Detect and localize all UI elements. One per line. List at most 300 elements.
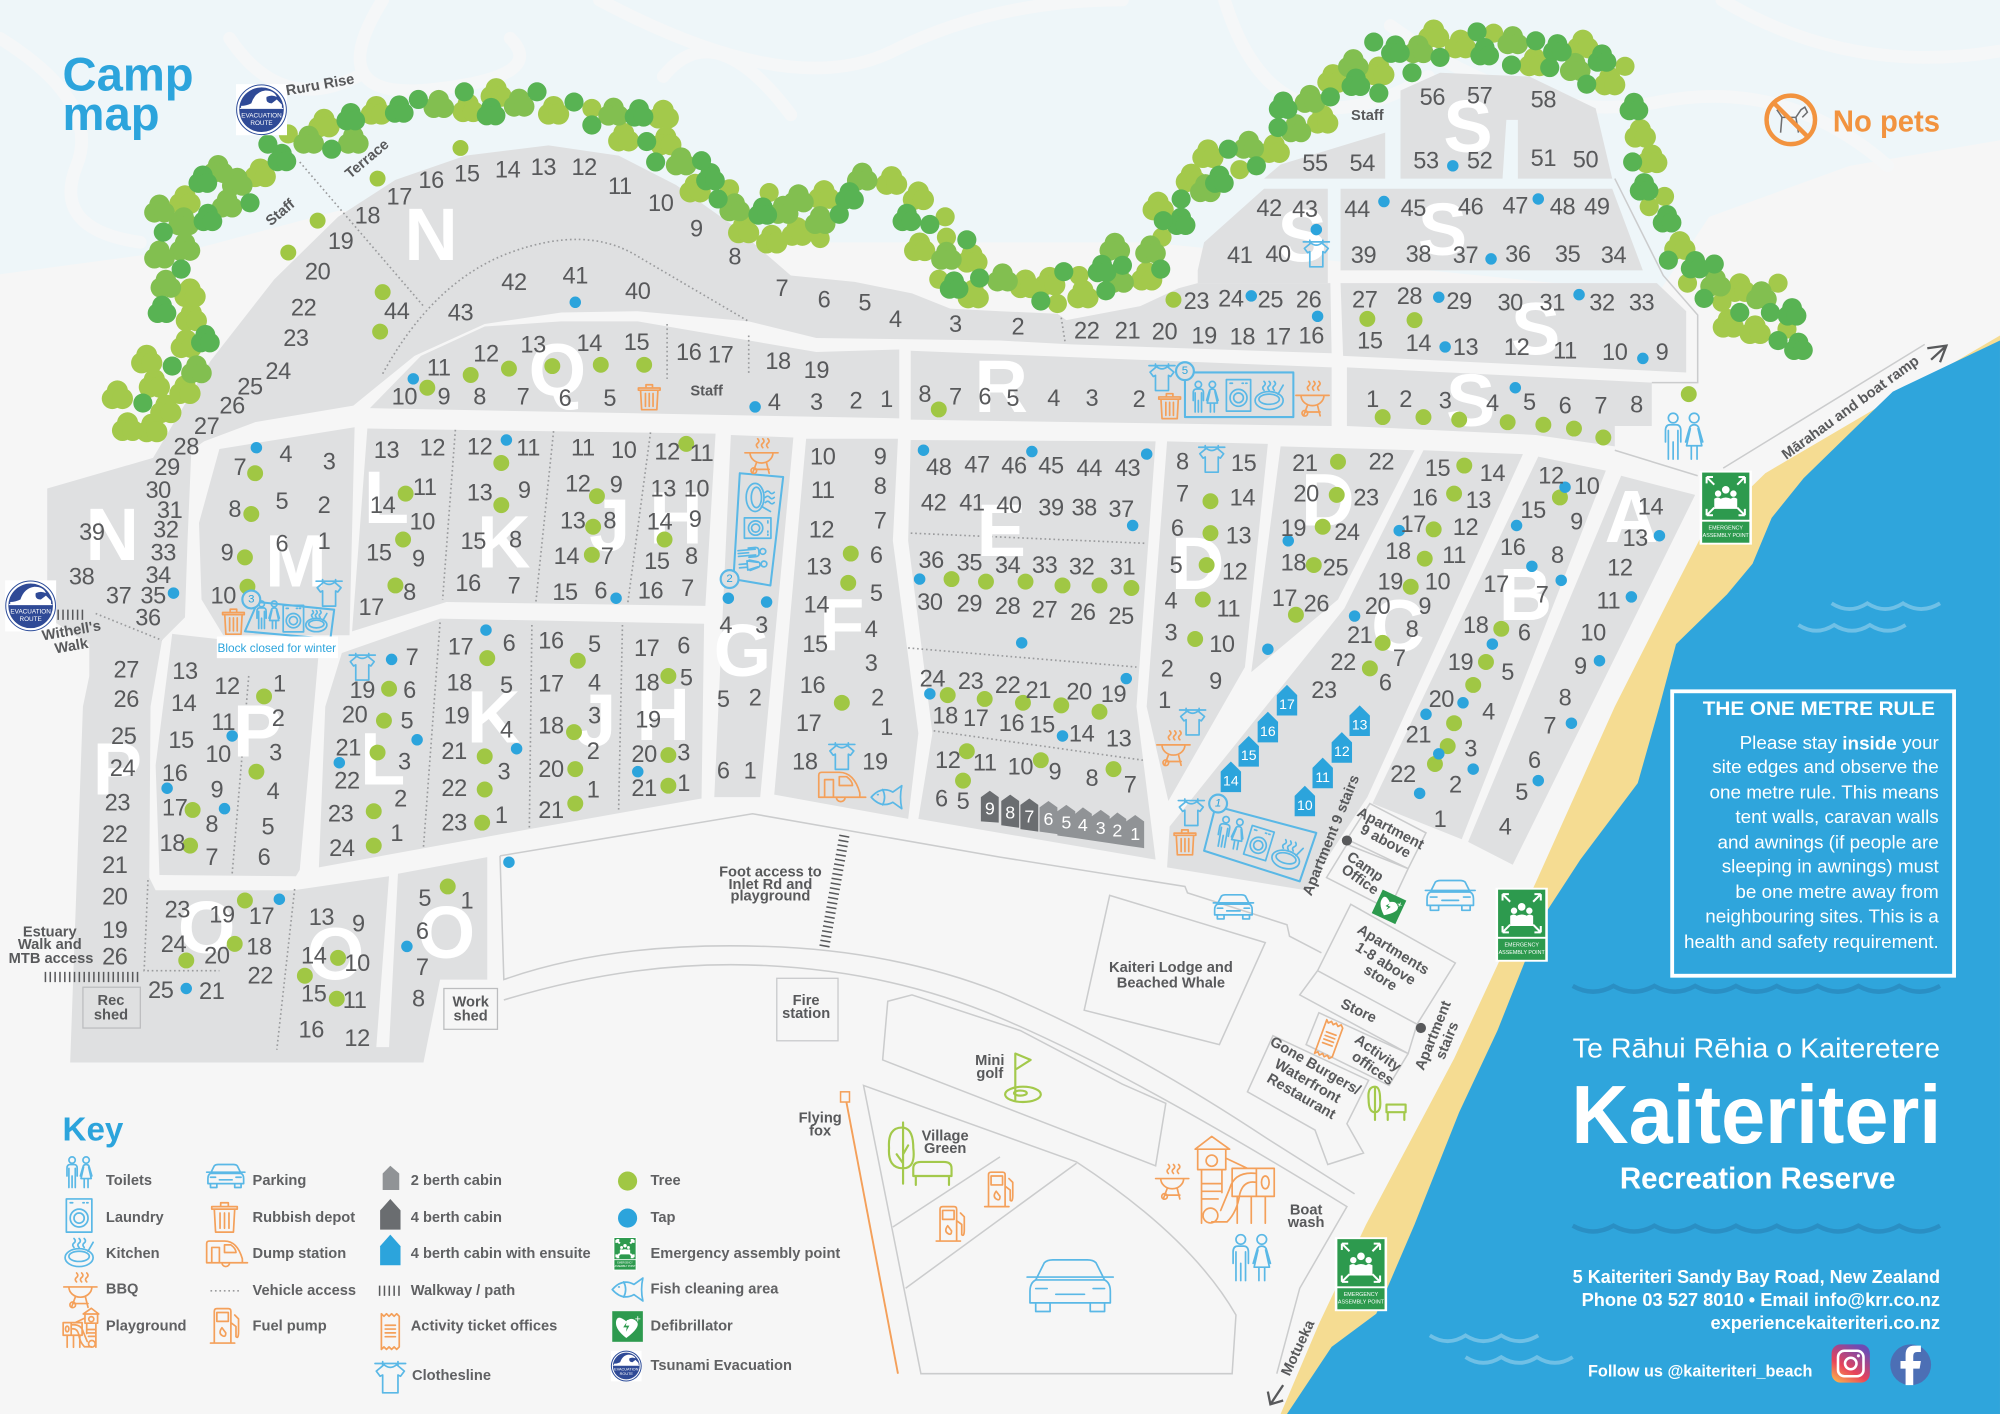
site numbers: N upper: 8: [728, 243, 741, 269]
site numbers: N upper: 42: [501, 269, 527, 295]
site numbers: L K J H lower: 18: [634, 669, 660, 695]
4 berth and 2 berth cabins: 3: [1096, 818, 1106, 838]
4 berth and 2 berth cabins: 7: [1024, 806, 1034, 826]
site numbers: E: 17: [963, 705, 989, 731]
site numbers: E: 23: [958, 668, 984, 694]
site numbers: E: 34: [995, 552, 1021, 578]
site numbers: N upper: 12: [571, 154, 597, 180]
map labels: Flying: [799, 1111, 842, 1127]
site numbers: L K J H lower: 19: [444, 703, 469, 729]
site numbers: E: 44: [1077, 455, 1102, 481]
site numbers: N upper: 7: [776, 275, 788, 301]
icon: mini golf: [1005, 1054, 1041, 1102]
site numbers: L K J H upper: 10: [684, 476, 709, 502]
site numbers: D: 21: [1292, 450, 1318, 476]
site numbers: A: 13: [1622, 525, 1648, 551]
icon: fish cleaning: [871, 786, 902, 809]
block closed for winter label: Block closed for winter: [217, 641, 336, 655]
site numbers: M: 9: [221, 539, 233, 565]
big block letters: G: [714, 609, 771, 692]
site numbers: L K J H lower: 22: [441, 775, 467, 801]
big block letters: K: [477, 501, 531, 584]
map labels: Apartments: [1354, 922, 1432, 979]
facilities box 2: 2: [726, 573, 733, 585]
block: Q: [370, 321, 899, 418]
site numbers: N upper: 9: [690, 215, 703, 241]
map labels: Foot access to: [719, 864, 822, 880]
shed boxes: Work: [452, 995, 490, 1011]
site numbers: N upper: 37: [106, 583, 131, 609]
site numbers: F and G: 10: [810, 444, 836, 470]
site numbers: Q: 12: [473, 340, 499, 366]
site numbers: B: 22: [1390, 761, 1416, 787]
site numbers: L K J H lower: 21: [538, 797, 564, 823]
site numbers: S: 44: [1344, 196, 1370, 222]
block: G: [714, 435, 793, 797]
site numbers: L K J H lower: 1: [587, 777, 599, 803]
key labels: [106, 1173, 840, 1384]
site numbers: L K J H lower: 17: [634, 635, 659, 661]
big block letters: [86, 85, 1658, 996]
site numbers: D: 14: [1230, 484, 1255, 510]
map labels: Apartment: [1354, 805, 1427, 853]
site numbers: S: 6: [1559, 393, 1572, 419]
site numbers: L K J H lower: 23: [441, 810, 467, 836]
site numbers: L K J H upper: 8: [685, 543, 698, 569]
site numbers: C: 21: [1347, 622, 1372, 648]
site numbers: D: 10: [1209, 631, 1235, 657]
site numbers: S: 13: [1453, 334, 1479, 360]
site numbers: L K J H lower: 5: [588, 631, 601, 657]
site numbers: D: 2: [1161, 655, 1173, 681]
site numbers: N upper: 18: [355, 203, 380, 229]
map labels: Waterfront: [1272, 1056, 1343, 1107]
site numbers: Q: 17: [708, 342, 733, 368]
site numbers: O: 20: [204, 942, 230, 968]
4 berth and 2 berth cabins: 8: [1005, 802, 1015, 822]
site numbers: Q: 10: [392, 384, 417, 410]
site numbers: D: 23: [1353, 484, 1379, 510]
site numbers: E: 19: [1101, 681, 1126, 707]
site numbers: N upper: 22: [291, 294, 316, 320]
site numbers: E: 33: [1032, 552, 1058, 578]
site numbers: S: 23: [1184, 288, 1209, 314]
site numbers: B: 1: [1434, 806, 1446, 832]
site numbers: R: 3: [1085, 385, 1098, 411]
site numbers: C: 17: [1401, 511, 1426, 537]
key labels: Tree: [651, 1173, 681, 1189]
site numbers: A: 7: [1543, 713, 1556, 739]
walkways: [45, 615, 844, 977]
site numbers: C: 22: [1330, 649, 1356, 675]
light waves in the sea: [1430, 603, 1940, 1363]
map labels: Withell's: [41, 618, 102, 644]
site numbers: D: 13: [1226, 523, 1252, 549]
site numbers: left column and P: 24: [110, 755, 135, 781]
site numbers: D: 25: [1323, 555, 1348, 581]
site numbers: L K J H upper: 16: [638, 578, 664, 604]
site numbers: R: 5: [1006, 385, 1019, 411]
site numbers: D: 5: [1170, 552, 1183, 578]
site numbers: M: 5: [276, 488, 289, 514]
site numbers: L K J H upper: 14: [370, 492, 396, 518]
site numbers: L K J H lower: 20: [631, 741, 657, 767]
map labels: Apartment 9 stairs: [1300, 773, 1363, 898]
site numbers: B: 19: [1448, 649, 1473, 675]
site numbers: F and G: 4: [865, 616, 878, 642]
site numbers: O: 1: [460, 887, 473, 913]
map labels: offices: [1348, 1049, 1396, 1089]
site numbers: N upper: 16: [418, 167, 444, 193]
site numbers: S: 48: [1550, 194, 1575, 220]
site numbers: Q: 7: [517, 384, 529, 410]
site numbers: left column and P: 14: [171, 690, 197, 716]
big block letters: M: [265, 520, 327, 603]
site numbers: B: 9: [1570, 509, 1583, 535]
big block letters: Q: [529, 328, 586, 411]
site numbers: S: 57: [1467, 83, 1492, 109]
site numbers: N upper: 29: [154, 454, 180, 480]
site numbers: L K J H lower: 5: [401, 708, 414, 734]
site numbers: S: 16: [1298, 322, 1324, 348]
key labels: Rubbish depot: [253, 1210, 355, 1226]
map labels: Village: [922, 1128, 969, 1144]
key labels: 4 berth cabin with ensuite: [411, 1246, 591, 1262]
map labels: Motueka: [1279, 1317, 1319, 1379]
site numbers: F and G: 11: [811, 477, 835, 503]
site numbers: S: 32: [1589, 289, 1615, 315]
site numbers: B: 7: [1536, 581, 1548, 607]
icon: small tree and bench: [1368, 1087, 1406, 1120]
icon: dump station: [819, 772, 866, 802]
block: D second: [1251, 446, 1415, 672]
big block letters: N: [86, 493, 139, 576]
site numbers: M: 6: [276, 530, 289, 556]
site numbers: S: 52: [1467, 148, 1492, 174]
site numbers: C: 15: [1425, 455, 1450, 481]
site numbers: L K J H lower: 6: [677, 632, 690, 658]
key labels: BBQ: [106, 1282, 138, 1298]
site numbers: Q: 8: [473, 384, 486, 410]
site numbers: L K J H upper: 11: [571, 435, 595, 461]
site numbers: S: 42: [1256, 195, 1282, 221]
site numbers: L K J H lower: 6: [503, 630, 516, 656]
map labels: playground: [731, 889, 810, 905]
site numbers: O: 9: [352, 910, 365, 936]
site numbers: L K J H lower: 3: [677, 740, 690, 766]
site numbers: L K J H upper: [358, 433, 713, 620]
site numbers: F and G: 2: [871, 685, 884, 711]
site numbers: D: 11: [1216, 595, 1240, 621]
site numbers: left column and P: 6: [258, 844, 271, 870]
site numbers: D: 3: [1165, 620, 1178, 646]
site numbers: L K J H lower: 1: [677, 770, 690, 796]
site numbers: E: 27: [1032, 597, 1057, 623]
key icons: [65, 1157, 643, 1393]
site numbers: S: 56: [1420, 84, 1445, 110]
site numbers: C: 16: [1412, 484, 1438, 510]
site numbers: E: 20: [1066, 678, 1092, 704]
site numbers: A: 5: [1515, 779, 1528, 805]
site numbers: left column and P: [102, 657, 286, 970]
site numbers: A: 9: [1574, 653, 1587, 679]
site numbers: E: 6: [935, 785, 948, 811]
site numbers: L K J H lower: 3: [497, 759, 510, 785]
4 berth cabins with ensuite: 16: [1260, 723, 1276, 739]
block: E: [908, 440, 1156, 860]
big block letters: J: [575, 679, 616, 762]
shed boxes: shed: [454, 1009, 488, 1025]
site numbers: S: 15: [1357, 328, 1383, 354]
site numbers: O: 13: [309, 904, 334, 930]
site numbers: L K J H upper: 14: [647, 509, 672, 535]
map labels: Staff: [263, 196, 298, 230]
map labels: wash: [1287, 1215, 1324, 1231]
key labels: Playground: [106, 1319, 187, 1335]
site numbers: O: 19: [209, 902, 235, 928]
panel: the one metre rule: site edges and observe the: [1712, 756, 1939, 777]
site numbers: C: 8: [1406, 616, 1419, 642]
social line: [1588, 1344, 1931, 1385]
4 berth and 2 berth cabins: [981, 791, 1144, 848]
site numbers: L K J H lower: 19: [635, 706, 661, 732]
site numbers: Q: 14: [577, 330, 602, 356]
site numbers: E: 25: [1108, 603, 1134, 629]
site numbers: L K J H upper: 7: [681, 575, 694, 601]
site numbers: S: 54: [1350, 150, 1375, 176]
site numbers: N upper: 34: [145, 562, 171, 588]
site numbers: L K J H lower: 17: [538, 671, 564, 697]
site numbers: O: 12: [344, 1025, 370, 1051]
site numbers: F and G: 9: [874, 444, 886, 470]
key labels: Parking: [253, 1173, 306, 1189]
site numbers: C: 23: [1311, 677, 1337, 703]
block: A: [1468, 476, 1695, 865]
site numbers: E: 36: [918, 547, 944, 573]
panel: key: [63, 1111, 840, 1393]
branding: Recreation Reserve: [1620, 1162, 1895, 1196]
panel: the one metre rule: one metre rule. This means: [1710, 782, 1939, 803]
site numbers: L K J H lower: 5: [500, 672, 513, 698]
site numbers: B: 16: [1500, 534, 1526, 560]
site numbers: F and G: 12: [809, 516, 834, 542]
tsunami evacuation signs: [5, 84, 287, 631]
site numbers: left column and P: 3: [269, 740, 282, 766]
site numbers: N upper: 20: [305, 259, 331, 285]
site numbers: B: 15: [1520, 497, 1546, 523]
big block letters: S: [1511, 288, 1560, 371]
site numbers: E: 48: [926, 454, 952, 480]
site numbers: E: 43: [1115, 455, 1141, 481]
map labels: Kaiteri Lodge and: [1109, 960, 1233, 976]
site numbers: N upper: [69, 154, 1024, 630]
site numbers: Q: 11: [427, 354, 451, 380]
site numbers: L K J H lower: 7: [406, 644, 418, 670]
site numbers: A: 14: [1638, 493, 1663, 519]
map labels: Apartment: [1413, 999, 1455, 1073]
site numbers: S: 11: [1553, 338, 1577, 364]
map labels: fox: [809, 1123, 832, 1139]
map labels: Gone Burgers/: [1267, 1034, 1363, 1099]
site numbers: N upper: 30: [145, 477, 171, 503]
site numbers: O: 21: [199, 978, 224, 1004]
site numbers: S: 31: [1540, 289, 1565, 315]
background koru pattern: [0, 0, 2000, 293]
site numbers: L K J H upper: 6: [594, 578, 607, 604]
site numbers: N upper: 36: [135, 604, 161, 630]
site numbers: E: 41: [959, 490, 985, 516]
map labels: stairs: [1433, 1020, 1462, 1062]
icon: ticket office: [1315, 1020, 1344, 1059]
vehicle access dotted lines: [96, 162, 1147, 1050]
site numbers: N upper: 17: [387, 183, 412, 209]
site numbers: L K J H lower: 2: [394, 785, 407, 811]
site numbers: B: 21: [1406, 722, 1431, 748]
site numbers: N upper: 24: [265, 358, 291, 384]
site numbers: O: 6: [416, 918, 429, 944]
site numbers: N upper: 15: [454, 160, 480, 186]
site numbers: M: 10: [210, 583, 236, 609]
contact details: experiencekaiteriteri.co.nz: [1710, 1312, 1940, 1333]
site numbers: D: 26: [1304, 590, 1329, 616]
map labels: Inlet Rd and: [728, 877, 812, 893]
4 berth cabins with ensuite: 14: [1223, 773, 1239, 789]
site numbers: L K J H upper: 9: [518, 477, 531, 503]
defibrillator: [1372, 890, 1406, 924]
site numbers: left column and P: 20: [102, 884, 128, 910]
site numbers: F and G: 2: [749, 685, 761, 711]
site numbers: A: 11: [1597, 588, 1620, 614]
icon: facebook: [1890, 1344, 1931, 1385]
site numbers: Q: 19: [804, 357, 829, 383]
site numbers: N upper: 10: [648, 190, 674, 216]
site numbers: F and G: 15: [802, 631, 828, 657]
site numbers: A: 6: [1528, 747, 1541, 773]
site numbers: left column and P: 26: [114, 686, 139, 712]
map labels: 9 above: [1357, 822, 1413, 862]
site numbers: E: 38: [1071, 495, 1097, 521]
direction arrows: [1268, 346, 1946, 1404]
site numbers: E: 26: [1070, 599, 1096, 625]
icon: fuel pumps: [936, 1172, 1013, 1241]
map labels: MTB access: [9, 951, 93, 967]
site numbers: S: 14: [1406, 330, 1431, 356]
panel: the one metre rule: Please stay inside your: [1740, 732, 1939, 753]
4 berth and 2 berth cabins: 2: [1112, 820, 1122, 840]
site numbers: S: 25: [1258, 287, 1283, 313]
block: F: [774, 439, 918, 819]
key labels: Fish cleaning area: [651, 1282, 779, 1298]
site numbers: B: 6: [1518, 620, 1531, 646]
site numbers: left column and P: 11: [211, 709, 235, 735]
site numbers: E: 10: [1008, 754, 1033, 780]
site numbers: E: 40: [996, 492, 1022, 518]
site numbers: S: 28: [1397, 283, 1422, 309]
site numbers: F and G: 19: [862, 748, 888, 774]
site numbers: D: [1158, 449, 1394, 713]
site numbers: C: 13: [1466, 487, 1491, 513]
site numbers: left column and P: 12: [214, 673, 240, 699]
site numbers: L K J H upper: 12: [654, 439, 680, 465]
site numbers: S: 3: [1439, 388, 1452, 414]
4 berth cabins with ensuite: 11: [1315, 769, 1330, 785]
site numbers: L K J H upper: 7: [508, 572, 520, 598]
site numbers: B: 17: [1483, 571, 1509, 597]
site numbers: D: 20: [1293, 481, 1319, 507]
site numbers: Q: 16: [676, 339, 702, 365]
branding: [1571, 1032, 1941, 1196]
site numbers: O: 23: [165, 896, 190, 922]
site numbers: E: 13: [1106, 726, 1132, 752]
block closed for winter label: [217, 636, 338, 658]
site numbers: C: 18: [1385, 538, 1411, 564]
4 berth cabins with ensuite: 10: [1297, 797, 1313, 813]
site numbers: Q: 13: [520, 331, 546, 357]
site numbers: L K J H upper: 15: [552, 579, 578, 605]
site numbers: S: 53: [1413, 148, 1439, 174]
big block letters: P: [233, 689, 282, 772]
site numbers: B: 4: [1482, 699, 1495, 725]
site numbers: S: 12: [1504, 334, 1529, 360]
site numbers: Q: 6: [559, 385, 572, 411]
site numbers: L K J H lower: 19: [350, 677, 375, 703]
panel: the one metre rule: and awnings (if people are: [1718, 831, 1939, 852]
site numbers: L K J H upper: 13: [374, 437, 399, 463]
site numbers: S: 37: [1453, 242, 1478, 268]
site numbers: L K J H upper: 12: [420, 435, 445, 461]
key labels: Defibrillator: [651, 1319, 733, 1335]
road and building outlines: [500, 179, 1925, 1374]
block: D first: [1147, 441, 1268, 801]
site numbers: S: 8: [1630, 391, 1643, 417]
title: [63, 49, 194, 141]
site numbers: O: 11: [343, 987, 366, 1013]
site numbers: S: 1: [1366, 386, 1379, 412]
site numbers: E: 5: [957, 788, 970, 814]
site numbers: D: 15: [1231, 450, 1257, 476]
title: map: [63, 88, 160, 141]
block: C and cabins: [1167, 450, 1523, 890]
site numbers: F and G: 3: [865, 650, 878, 676]
key labels: Toilets: [106, 1173, 152, 1189]
site numbers: B: 2: [1449, 771, 1462, 797]
site numbers: L K J H lower: 18: [538, 713, 564, 739]
site numbers: E: 22: [995, 672, 1020, 698]
site numbers: L K J H lower: 20: [342, 701, 368, 727]
site numbers: E: 47: [964, 451, 990, 477]
map labels: Staff: [1351, 108, 1384, 124]
shed boxes: shed: [94, 1007, 128, 1023]
big block letters: B: [1499, 553, 1552, 636]
branding: Te Rāhui Rēhia o Kaiteretere: [1573, 1032, 1940, 1063]
site numbers: L K J H upper: 11: [516, 435, 540, 461]
panel: the one metre rule: sleeping in awnings) must: [1722, 856, 1940, 877]
site numbers: left column and P: 1: [273, 671, 286, 697]
dark wave dividers: [1573, 986, 1940, 1231]
site numbers: L K J H lower: 18: [446, 669, 472, 695]
block: N and left column and O: [47, 145, 1332, 1062]
site numbers: L K J H lower: 22: [334, 768, 360, 794]
key labels: Kitchen: [106, 1246, 160, 1262]
site numbers: F and G: 5: [870, 580, 883, 606]
4 berth and 2 berth cabins: 4: [1078, 815, 1088, 835]
site numbers: E: 29: [957, 590, 982, 616]
4 berth and 2 berth cabins: 5: [1061, 813, 1071, 833]
icons: rubbish depots: [223, 385, 1196, 855]
site numbers: C: 12: [1453, 514, 1478, 540]
site numbers: S: 34: [1601, 242, 1627, 268]
taps: [167, 166, 1659, 988]
